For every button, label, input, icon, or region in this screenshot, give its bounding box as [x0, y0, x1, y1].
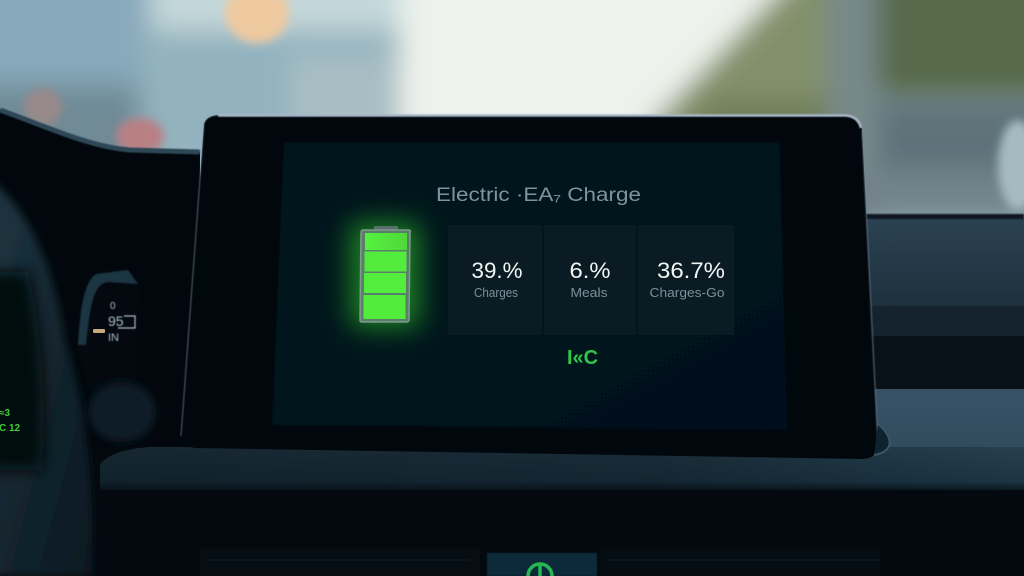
stalk markings — [108, 301, 135, 344]
battery icon — [350, 222, 420, 328]
card: charges: Charges — [474, 286, 518, 300]
card: charges: 39.% — [472, 258, 522, 283]
centre display — [181, 115, 890, 459]
battery cell 3 — [364, 273, 406, 293]
stalk markings: 95 — [108, 313, 124, 329]
stalk markings: IN — [108, 332, 119, 344]
lower dashboard shelf — [0, 447, 1024, 576]
card: charges-go: Charges-Go — [650, 286, 725, 300]
card: meals: 6.% — [570, 258, 610, 283]
battery cell 4 — [364, 295, 406, 319]
stalk knob — [88, 382, 156, 442]
blurred street background — [0, 0, 1024, 240]
card: meals: Meals — [570, 286, 608, 300]
bottom centre button with green icon — [487, 553, 597, 576]
stalk markings: 0 — [110, 301, 116, 312]
steering wheel — [0, 180, 93, 576]
card: charges — [448, 225, 542, 335]
card: charges-go — [638, 225, 734, 335]
display bezel — [181, 115, 878, 459]
stat cards — [448, 225, 734, 335]
battery glow — [350, 222, 420, 328]
gear stalk — [78, 270, 138, 390]
green label: I«C — [567, 346, 598, 369]
instrument cluster green readout — [0, 408, 21, 434]
card: charges-go: 36.7% — [657, 258, 725, 283]
battery cell 1 — [365, 233, 407, 250]
battery cell 2 — [364, 252, 406, 272]
right dashboard surfaces — [860, 214, 1024, 461]
card: meals — [544, 225, 636, 335]
inner screen panel — [272, 143, 787, 430]
left dashboard and pillar trim — [0, 110, 200, 460]
title: Electric ·EA₇ Charge — [436, 184, 641, 206]
